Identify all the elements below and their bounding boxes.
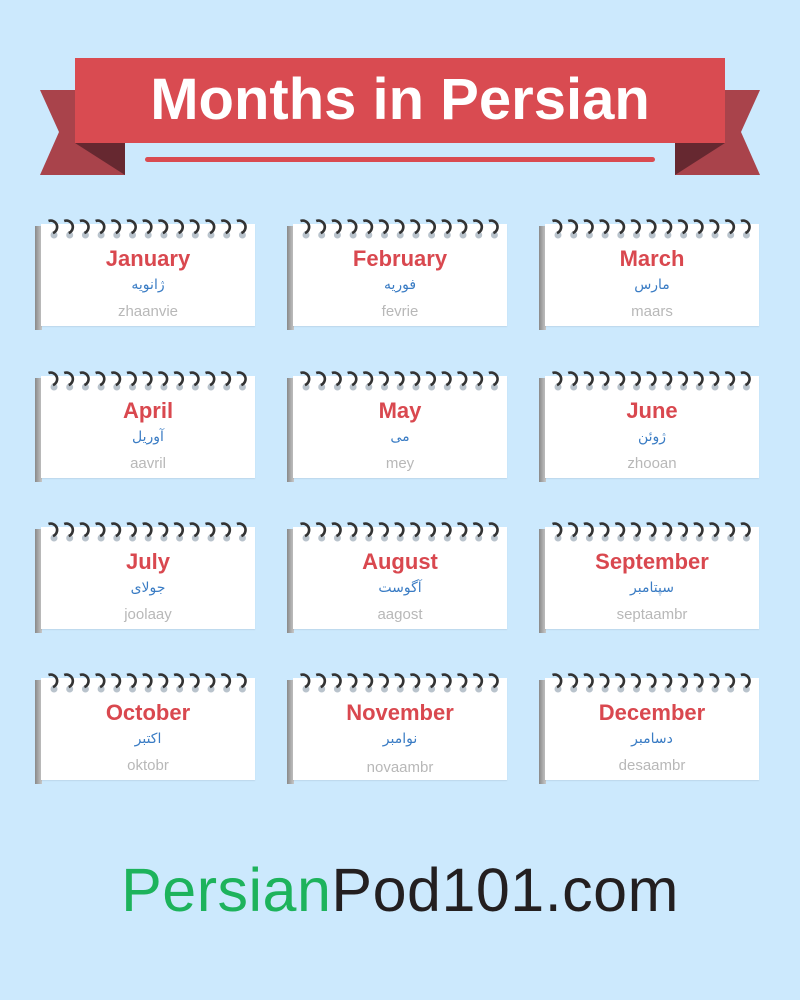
card: March: maars: [631, 303, 673, 320]
card: September: septaambr: [617, 606, 687, 623]
card: July: جولای: [131, 579, 165, 595]
card: September: سپتامبر: [630, 579, 674, 595]
card: August: [287, 522, 507, 633]
card: July: joolaay: [124, 606, 172, 623]
card: February: February: [353, 246, 447, 271]
card: July: [35, 522, 255, 633]
card: January: zhaanvie: [118, 303, 178, 320]
title text: Months in Persian: [150, 67, 650, 132]
card: March: March: [620, 246, 684, 271]
title banner: [40, 58, 760, 175]
card: June: [539, 371, 759, 482]
card: December: December: [599, 700, 705, 725]
card: November: November: [346, 700, 454, 725]
card: January: [35, 219, 255, 330]
card: January: ژانویه: [131, 276, 165, 292]
card: February: فوریه: [384, 276, 416, 292]
card: August: aagost: [377, 606, 423, 623]
card: October: اکتبر: [135, 730, 161, 746]
card: November: novaambr: [367, 759, 433, 776]
card: November: [287, 673, 507, 784]
card: May: May: [379, 398, 421, 423]
card: March: مارس: [634, 276, 670, 292]
card: May: mey: [386, 455, 414, 472]
card: June: zhooan: [627, 455, 677, 472]
card: October: oktobr: [127, 757, 169, 774]
card: April: آوریل: [132, 428, 164, 444]
card: December: desaambr: [619, 757, 685, 774]
card: January: January: [106, 246, 190, 271]
card: August: August: [362, 549, 438, 574]
card: December: دسامبر: [631, 730, 673, 746]
card: May: [287, 371, 507, 482]
card: November: نوامبر: [383, 730, 417, 746]
card: August: آگوست: [378, 579, 422, 595]
card: June: ژوئن: [638, 428, 666, 444]
card: September: [539, 522, 759, 633]
card: June: June: [626, 398, 678, 423]
card: October: [35, 673, 255, 784]
card: October: October: [106, 700, 190, 725]
card: July: July: [126, 549, 170, 574]
card: April: aavril: [130, 455, 166, 472]
card: May: می: [390, 428, 410, 444]
card: April: [35, 371, 255, 482]
card: April: April: [123, 398, 173, 423]
footer logo: PersianPod101.com: [121, 856, 679, 924]
card: February: fevrie: [382, 303, 418, 320]
card: February: [287, 219, 507, 330]
card: December: [539, 673, 759, 784]
card: March: [539, 219, 759, 330]
card: September: September: [595, 549, 709, 574]
